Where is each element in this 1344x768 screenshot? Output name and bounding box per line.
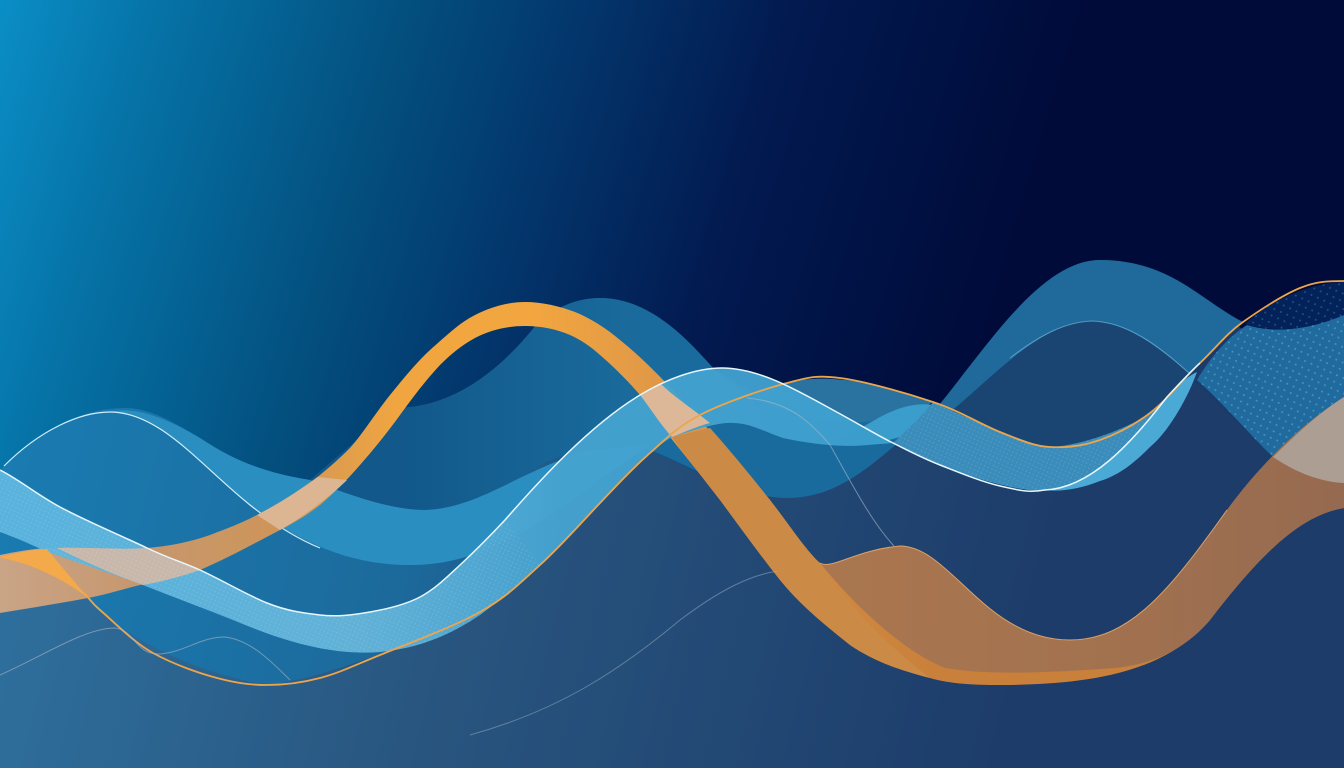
- thin line: brown fill top edge: [820, 510, 1227, 640]
- wave: center bright band end: [833, 404, 935, 445]
- thin line: white ribbon top edge: [0, 363, 1200, 616]
- ribbon: orange lower-right brown fill: [820, 397, 1344, 673]
- thin line: center arc grey: [747, 398, 894, 546]
- overlap: center beige patch: [640, 383, 710, 437]
- thin line: right arc: [1010, 321, 1190, 374]
- mesh: left ribbon texture: [0, 470, 540, 653]
- wave: right inner panel: [950, 321, 1190, 470]
- overlap: upper-left beige patch: [257, 477, 347, 530]
- ribbon: main white-edged translucent blue: [0, 368, 893, 653]
- thin line: lower left grey curve: [0, 628, 290, 680]
- thin line: lower center grey curve: [470, 571, 778, 735]
- wave: lens under orange arc: [747, 379, 933, 422]
- ribbon: orange band lower part over ribbon: [672, 428, 930, 678]
- wave: right mesh panel: [1197, 282, 1344, 457]
- ribbon: upper-left light blue band: [110, 410, 650, 565]
- layer: bottom lighter region: [0, 378, 1344, 768]
- layer: mid sea region: [0, 260, 1344, 768]
- thin line: upper-left white curve: [4, 412, 320, 548]
- wave: center blue hill: [310, 298, 935, 510]
- ribbon: right bright sliver: [1045, 372, 1197, 491]
- wave: left orange sliver: [0, 549, 88, 598]
- wave: right upper teal band: [935, 260, 1243, 412]
- ribbon: right translucent section: [893, 363, 1200, 490]
- mesh: right ribbon texture: [893, 363, 1200, 490]
- thin line: orange curve: [0, 281, 1344, 685]
- ribbon: main orange band: [0, 302, 1344, 685]
- overlap: left grey-beige patch: [57, 548, 200, 585]
- overlap: right beige patch: [1273, 397, 1344, 483]
